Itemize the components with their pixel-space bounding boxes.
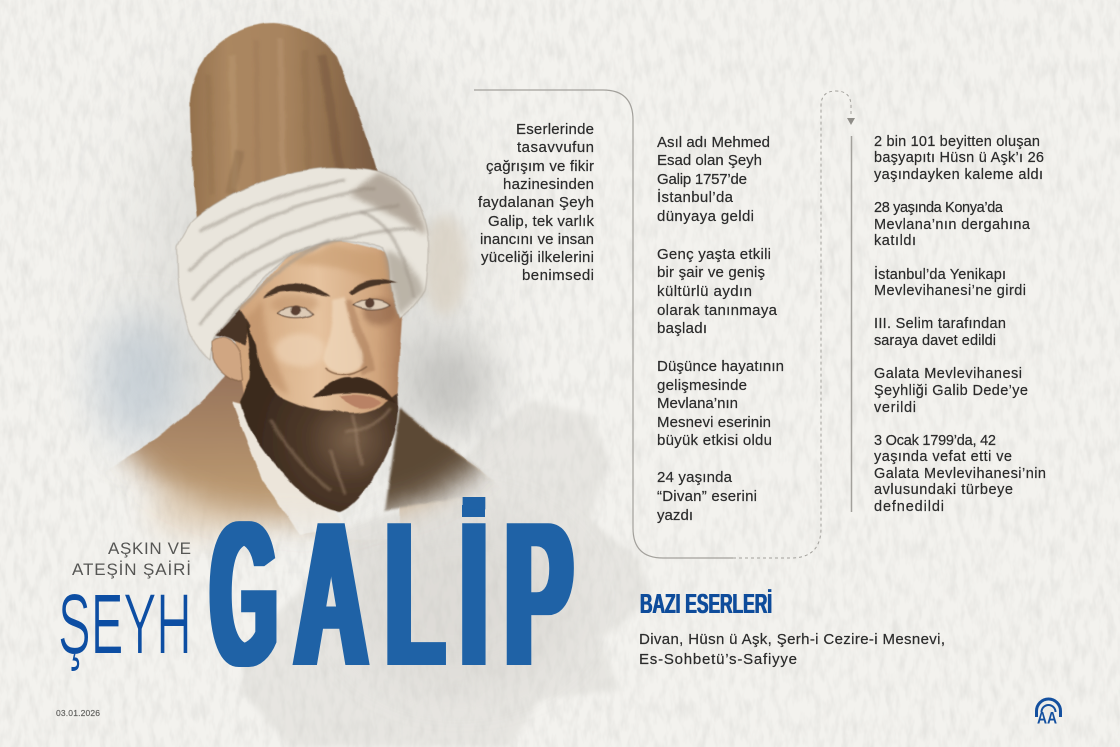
turban — [177, 168, 428, 360]
text block: intro: çağrışım ve fikir — [486, 158, 594, 175]
text block: biography: Esad olan Şeyh — [657, 152, 762, 169]
title: Şeyh: ŞEYH — [58, 577, 192, 671]
title: Galip: P — [505, 480, 572, 709]
title: Galip: A — [295, 479, 367, 710]
text block: timeline: avlusundaki türbeye — [874, 482, 1013, 498]
logo: AA: AA — [1037, 709, 1057, 728]
title: Galip — [209, 497, 574, 667]
nose — [323, 297, 364, 373]
text block: timeline: katıldı — [874, 233, 916, 249]
map watercolor backdrop — [240, 400, 650, 747]
text block: timeline: başyapıtı Hüsn ü Aşk’ı 26 — [874, 150, 1044, 166]
arrowhead — [847, 118, 855, 125]
text block: timeline: saraya davet edildi — [874, 333, 996, 349]
title: Galip: L — [386, 479, 444, 709]
text block: timeline: İstanbul’da Yenikapı — [874, 265, 1006, 283]
text block: biography — [657, 134, 784, 524]
right vertical line — [850, 136, 852, 512]
text block: intro: Eserlerinde — [516, 121, 594, 138]
text block: timeline: verildi — [874, 400, 916, 416]
nose shadow — [345, 300, 375, 375]
turban folds — [188, 180, 415, 340]
text block: timeline: defnedildi — [874, 499, 944, 515]
text block: biography: Mesnevi eserinin — [657, 414, 771, 431]
text block: works list — [639, 631, 945, 668]
text block: biography: yazdı — [657, 507, 693, 524]
date: 03.01.2026 — [56, 708, 100, 718]
top-left connector and middle frame line — [474, 90, 855, 558]
text block: works list: Divan, Hüsn ü Aşk, Şerh-i Cezire-i Mesnevi, — [639, 631, 945, 648]
text block: intro: inancını ve insan — [480, 231, 594, 248]
text block: timeline: Mevlevihanesi’ne girdi — [874, 283, 1026, 299]
text block: intro: faydalanan Şeyh — [478, 194, 594, 211]
text block: timeline: yaşında vefat etti ve — [874, 449, 1012, 465]
text block: timeline: Şeyhliği Galib Dede’ye — [874, 383, 1028, 399]
cheek highlight — [275, 333, 325, 367]
text block: biography: dünyaya geldi — [657, 208, 754, 225]
lips — [340, 395, 381, 409]
text block: biography: İstanbul’da — [657, 188, 734, 206]
text block: timeline: Galata Mevlevihanesi — [874, 366, 1022, 382]
eyes — [277, 298, 390, 318]
text block: timeline: 2 bin 101 beyitten oluşan — [874, 134, 1040, 150]
cheek shading — [245, 300, 290, 395]
text block: biography: bir şair ve geniş — [657, 264, 765, 281]
eye sockets — [363, 299, 397, 325]
text block: biography: Mevlana’nın — [657, 395, 738, 412]
hair behind ear — [216, 310, 250, 345]
subtitle — [72, 539, 191, 579]
logo: AA — [1036, 699, 1060, 728]
text block: timeline: 3 Ocak 1799’da, 42 — [874, 433, 996, 449]
title: Galip: İ — [461, 478, 487, 709]
portrait of Şeyh Galip — [114, 22, 492, 540]
text block: biography: Genç yaşta etkili — [657, 246, 771, 263]
ear — [212, 337, 243, 381]
text block: biography: başladı — [657, 320, 707, 337]
title: Galip: G — [211, 479, 277, 709]
text block: timeline: Galata Mevlevihanesi’nin — [874, 466, 1046, 482]
text block: intro — [478, 121, 594, 284]
face — [235, 238, 402, 490]
text block: timeline: III. Selim tarafından — [874, 316, 1006, 332]
hat streaks — [208, 38, 340, 195]
forehead shading — [287, 244, 392, 286]
hat — [190, 23, 378, 218]
text block: biography: 24 yaşında — [657, 469, 733, 486]
text block: biography: Asıl adı Mehmed — [657, 134, 770, 151]
text block: timeline: Mevlana’nın dergahına — [874, 217, 1031, 233]
subtitle: AŞKIN VE — [108, 539, 191, 558]
dashed connector — [733, 91, 851, 558]
moustache — [313, 377, 396, 403]
text block: works list: Es-Sohbetü’s-Safiyye — [639, 651, 797, 668]
text block: biography: olarak tanınmaya — [657, 302, 778, 319]
text block: intro: benimsedi — [522, 267, 594, 284]
text block: biography: büyük etkisi oldu — [657, 432, 772, 449]
beard — [240, 322, 398, 512]
text block: intro: Galip, tek varlık — [488, 213, 594, 230]
portrait halo — [95, 55, 492, 535]
text block: timeline: 28 yaşında Konya’da — [874, 200, 1004, 216]
beard highlights — [270, 408, 390, 495]
turban right shadow — [350, 172, 426, 235]
text block: intro: tasavvufun — [517, 139, 594, 156]
text block: biography: kültürlü aydın — [657, 283, 752, 300]
subtitle: ATEŞİN ŞAİRİ — [72, 560, 191, 579]
coat — [114, 375, 492, 540]
text block: biography: Düşünce hayatının — [657, 358, 784, 375]
text block: intro: hazinesinden — [503, 176, 594, 193]
text block: timeline — [874, 134, 1046, 515]
text block: biography: Galip 1757’de — [657, 171, 747, 188]
text block: biography: “Divan” eserini — [657, 488, 757, 505]
text block: biography: gelişmesinde — [657, 377, 747, 394]
text block: intro: yüceliği ilkelerini — [481, 249, 594, 266]
text block: timeline: yaşındayken kaleme aldı — [874, 167, 1043, 183]
eyebrows — [263, 280, 397, 298]
heading: some works: BAZI ESERLERİ — [640, 588, 772, 619]
